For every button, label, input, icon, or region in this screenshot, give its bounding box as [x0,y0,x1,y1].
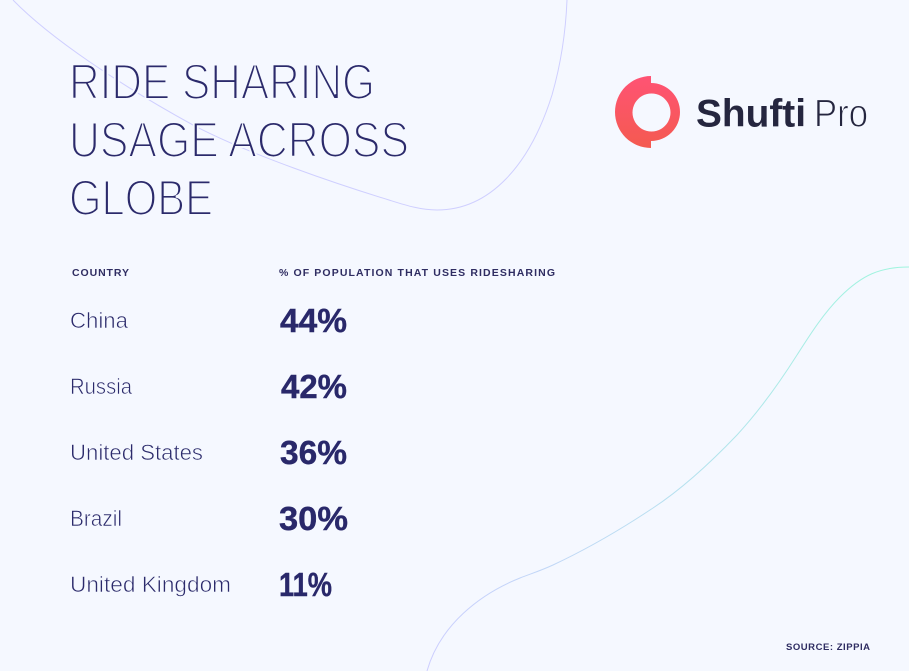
row: China [70,302,347,339]
title: RIDE SHARING [69,54,375,110]
column header: percentage: % OF POPULATION THAT USES RIDESHARING [279,267,555,279]
row: Brazil: 30% [279,500,348,537]
title: USAGE ACROSS [69,112,409,168]
source note: SOURCE: ZIPPIA [786,642,870,653]
logo: Shufti Pro [615,76,806,148]
logo wordmark: Shufti [696,92,806,136]
icon: logo ring [615,76,680,148]
title: GLOBE [69,170,213,226]
row: Russia: 42% [281,368,347,405]
row: United States [70,434,347,471]
decorative curve: right [427,267,909,671]
logo wordmark: Pro: Pro [814,92,868,136]
row: Brazil: Brazil [70,506,122,531]
row: China: China [70,308,128,333]
row: United States: United States [70,440,203,465]
row: United Kingdom: 11% [279,566,332,603]
row: United Kingdom: United Kingdom [70,572,231,597]
row: Brazil [70,500,348,537]
title [69,54,409,226]
column header: country: COUNTRY [72,267,129,279]
row: United Kingdom [70,566,332,603]
row: China: 44% [280,302,347,339]
row: Russia [70,368,347,405]
row: Russia: Russia [70,374,132,399]
decorative curve: top [13,0,567,210]
row: United States: 36% [280,434,347,471]
